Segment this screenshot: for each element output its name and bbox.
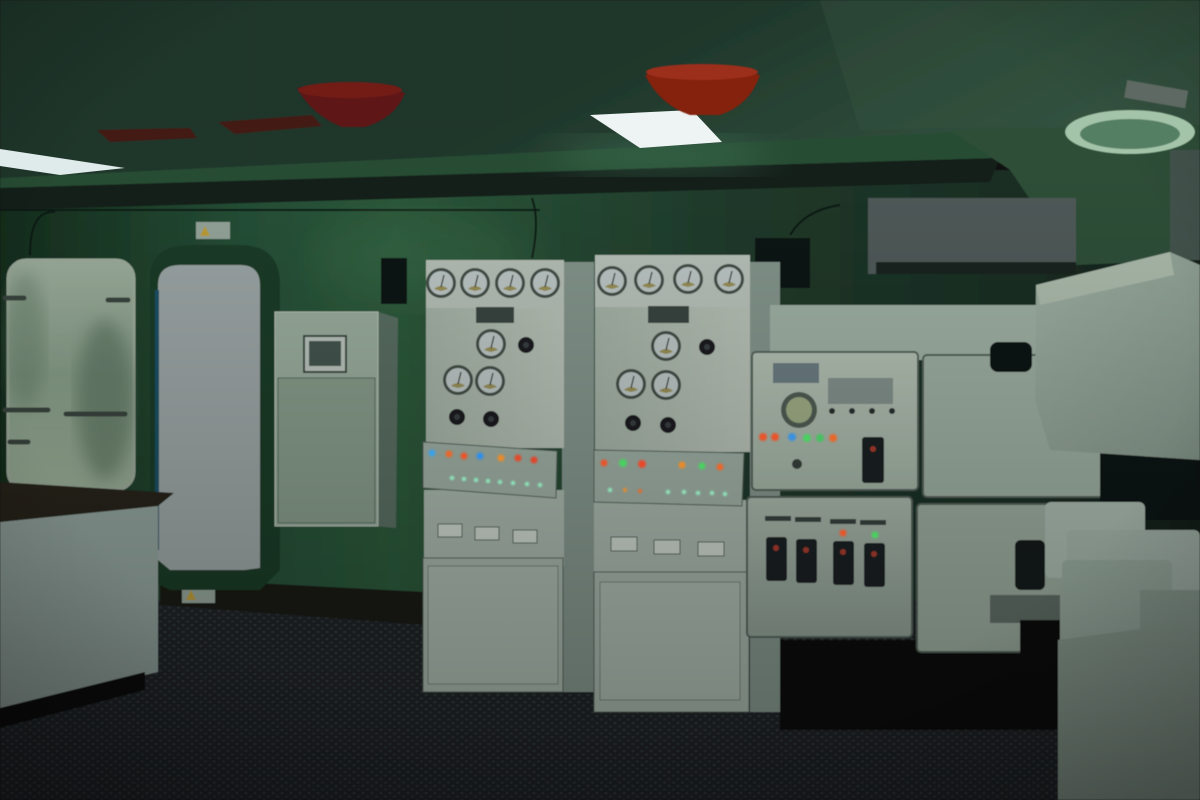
- explosion-proof box: upper right: [923, 355, 1103, 497]
- foreground machinery: [990, 150, 1200, 800]
- wall cables: [0, 198, 840, 258]
- ceiling fixture: red left: [297, 82, 405, 127]
- explosion-proof box: lower right: [917, 504, 1067, 652]
- ceiling brackets: [97, 115, 322, 142]
- cabinet 2: [594, 255, 780, 712]
- wall mottling: [310, 215, 530, 305]
- ceiling light: center: [590, 110, 722, 148]
- indicators: control boxes: [759, 433, 878, 538]
- cabinet 1: [423, 260, 594, 692]
- ceiling: [0, 0, 1200, 265]
- explosion-proof box: lower left: [747, 497, 912, 637]
- air conditioner: [868, 198, 1076, 274]
- junction box: [381, 258, 407, 304]
- door left: [5, 260, 134, 490]
- explosion-proof box: upper left: [752, 352, 918, 490]
- wall bracket box: [755, 238, 810, 288]
- wall: [0, 170, 1200, 610]
- ceiling hatch ring: [1065, 80, 1195, 154]
- wall cabinet: [275, 312, 398, 528]
- floor skirting: [160, 578, 425, 625]
- warning sign lower: [182, 585, 215, 603]
- back wall box: [770, 305, 1060, 730]
- indicators: cabinet 1: [428, 450, 542, 487]
- indicators: cabinet 2: [600, 459, 727, 496]
- table: [0, 482, 174, 728]
- ceiling fixture: red right: [645, 64, 760, 115]
- ceiling glow: [550, 137, 770, 173]
- doorway: [150, 245, 280, 590]
- floor: [0, 600, 1200, 800]
- warning sign: [196, 222, 230, 239]
- ceiling light: left: [0, 149, 125, 175]
